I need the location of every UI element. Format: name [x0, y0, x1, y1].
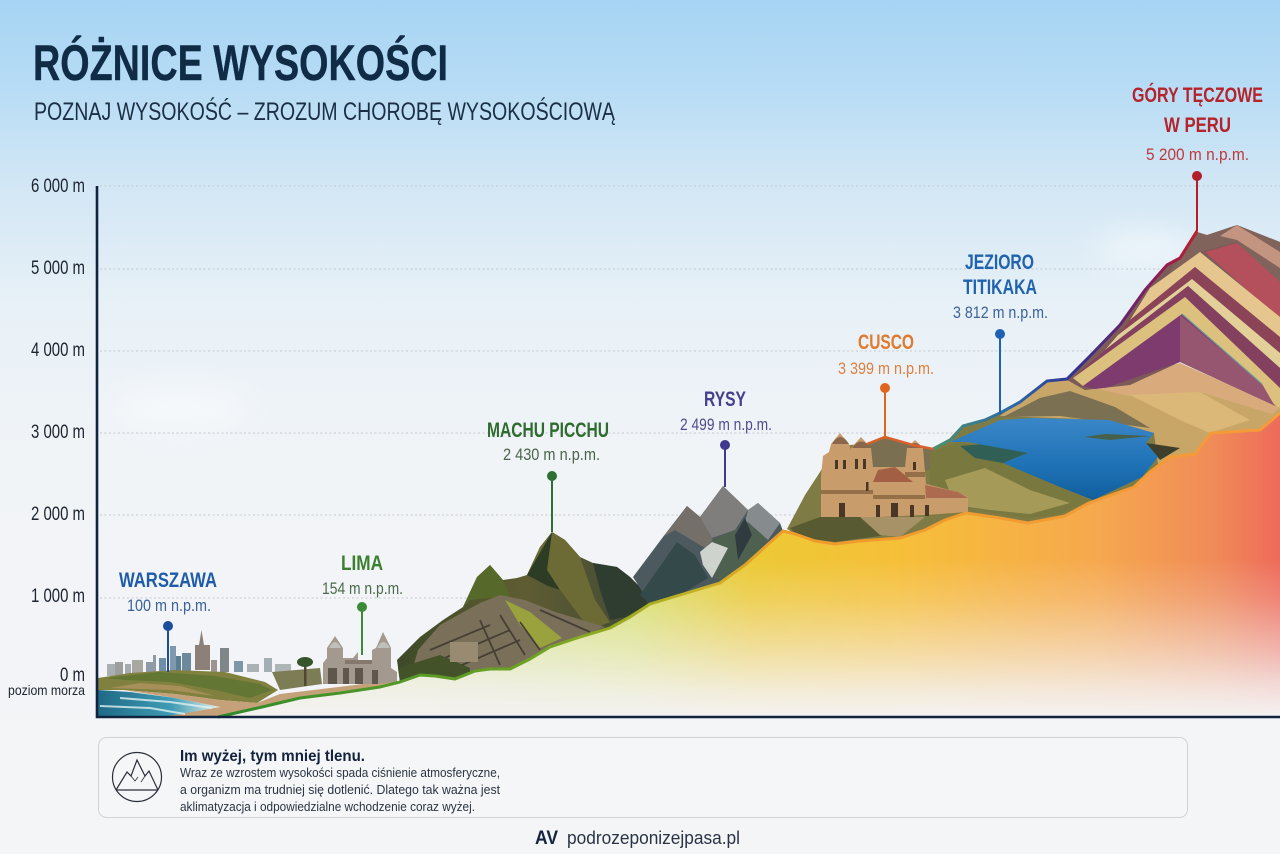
- scene: Machu Picchu: [397, 532, 650, 682]
- label: Jezioro Titicaca: 3 812 m n.p.m.: [953, 304, 1048, 322]
- scene: Warsaw skyline and coast: [98, 630, 395, 717]
- panel: info box: [98, 738, 1188, 818]
- pin: Cusco: [880, 384, 890, 437]
- pin: Rysy: [720, 440, 730, 487]
- title: RÓŻNICE WYSOKOŚCI: [33, 35, 448, 91]
- label: Cusco: [838, 331, 934, 378]
- y axis labels: 2 000 m: [31, 504, 85, 525]
- pin: Góry Tęczowe: [1192, 172, 1202, 231]
- label: Cusco: 3 399 m n.p.m.: [838, 360, 934, 378]
- icon: mountain in circle: [112, 752, 162, 802]
- y axis labels: 6 000 m: [31, 176, 85, 197]
- info text: aklimatyzacja i odpowiedzialne wchodzenie coraz wyżej.: [180, 799, 475, 814]
- scene: Lima cathedral: [297, 632, 397, 686]
- scene: Cusco and Titicaca terrain: [787, 363, 1280, 544]
- pin: Warszawa: [164, 622, 172, 672]
- scene: Rainbow Mountain: [1068, 225, 1280, 408]
- mountain ridge line: [933, 231, 1197, 449]
- info text: [180, 765, 500, 814]
- green cliffs: [98, 670, 278, 703]
- lake water: [950, 418, 1158, 500]
- y axis labels: 4 000 m: [31, 340, 85, 361]
- y axis labels: 0 m: [60, 665, 85, 686]
- label: Jezioro Titicaca: TITIKAKA: [963, 276, 1037, 299]
- church: [821, 433, 968, 517]
- sand beach: [123, 680, 395, 717]
- island: [1084, 434, 1150, 440]
- label: Cusco: CUSCO: [858, 331, 914, 354]
- label: Rysy: 2 499 m n.p.m.: [680, 416, 772, 434]
- label: Rysy: [680, 388, 772, 434]
- y axis labels: 5 000 m: [31, 258, 85, 279]
- foreground fields: [790, 517, 905, 542]
- Huayna Picchu peak shading: [527, 532, 610, 630]
- pin: Lima: [358, 602, 366, 655]
- label: Góry Tęczowe w Peru: W PERU: [1164, 114, 1231, 137]
- y axis labels: 3 000 m: [31, 422, 85, 443]
- pin: Titicaca: [996, 330, 1004, 414]
- pin: Machu Picchu: [548, 472, 556, 532]
- label: Warszawa: WARSZAWA: [119, 569, 217, 592]
- label: Machu Picchu: 2 430 m n.p.m.: [503, 446, 600, 464]
- scene: Rysy mountains: [633, 486, 783, 604]
- palm: [297, 657, 313, 686]
- ground area: [218, 413, 1280, 717]
- label: Warszawa: 100 m n.p.m.: [127, 597, 211, 615]
- label: Machu Picchu: MACHU PICCHU: [487, 419, 609, 442]
- tan shore: [1000, 365, 1280, 465]
- hills behind church: [867, 439, 938, 470]
- foliage along shore: [272, 668, 322, 690]
- footer: brand: podrozeponizejpasa.pl: [567, 828, 740, 848]
- clouds: [110, 230, 1195, 430]
- label: Warszawa: [119, 569, 217, 615]
- y axis labels: poziom morza: [8, 682, 85, 698]
- subtitle: POZNAJ WYSOKOŚĆ – ZROZUM CHOROBĘ WYSOKOŚCIOWĄ: [34, 96, 615, 126]
- label: Rysy: RYSY: [704, 388, 746, 411]
- info text: Wraz ze wzrostem wysokości spada ciśnienie atmosferyczne,: [180, 765, 500, 780]
- sea: [98, 690, 220, 717]
- chart grid lines: [100, 186, 1280, 598]
- label: Góry Tęczowe w Peru: 5 200 m n.p.m.: [1146, 146, 1249, 164]
- label: Jezioro Titicaca: JEZIORO: [965, 251, 1034, 274]
- info heading: Im wyżej, tym mniej tlenu.: [180, 748, 365, 765]
- info text: a organizm ma trudniej się dotlenić. Dlatego tak ważna jest: [180, 782, 500, 797]
- y axis labels: [8, 176, 85, 698]
- Cusco ridge line: [867, 437, 933, 449]
- label: Lima: 154 m n.p.m.: [322, 580, 403, 598]
- terraces: [410, 595, 605, 678]
- label: Jezioro Titicaca: [953, 251, 1048, 322]
- label: Machu Picchu: [487, 419, 609, 464]
- chart axes: [97, 186, 1280, 717]
- label: Lima: LIMA: [341, 552, 383, 575]
- label: Góry Tęczowe w Peru: [1132, 83, 1263, 164]
- label: Lima: [322, 552, 403, 598]
- footer: brand: AV: [535, 828, 558, 849]
- ground edge line: [218, 413, 1280, 717]
- ground fade: [230, 568, 1280, 716]
- y axis labels: 1 000 m: [31, 586, 85, 607]
- skyline: [107, 630, 291, 676]
